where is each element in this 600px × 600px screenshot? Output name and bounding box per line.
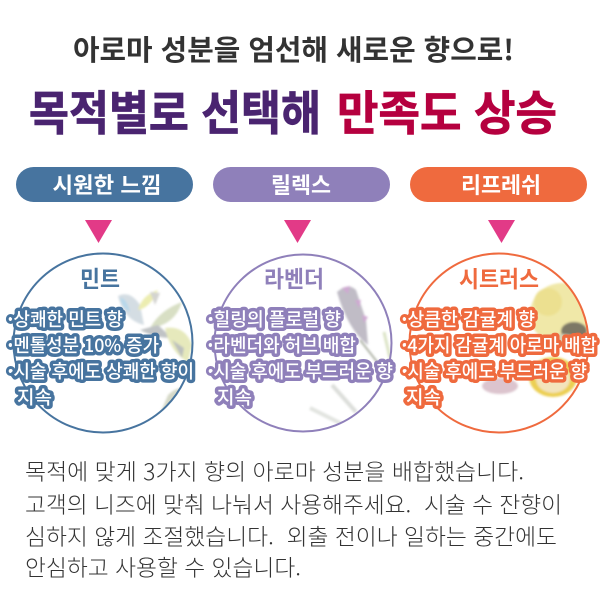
- list: mint: [8, 306, 194, 410]
- pill: refresh: [410, 167, 587, 202]
- heading: citrus: 시트러스: [459, 260, 539, 294]
- arrow: mint: [85, 220, 112, 243]
- panel: citrus: [402, 254, 597, 432]
- pill: refresh: 리프레쉬: [461, 168, 541, 200]
- main title: 목적별로 선택해: [29, 75, 321, 144]
- panel: lavender: [208, 254, 393, 432]
- subtitle: 아로마 성분을 엄선해 새로운 향으로!: [73, 28, 514, 69]
- pill: cool feeling: [16, 167, 193, 202]
- arrow: citrus: [488, 220, 515, 243]
- description text: 심하지 않게 조절했습니다. 외출 전이나 일하는 중간에도: [25, 520, 557, 552]
- list: lavender: ·라벤더와 허브 배합: [208, 332, 356, 358]
- list: mint: ·멘톨성분 10% 증가: [8, 332, 159, 358]
- list: citrus: ·4가지 감귤계 아로마 배합: [402, 332, 597, 358]
- list: citrus: 지속: [406, 384, 441, 410]
- main title: 만족도 상승: [337, 75, 557, 144]
- list: citrus: [402, 306, 597, 410]
- citrus illustration: [482, 283, 594, 397]
- description text: [25, 455, 562, 583]
- description text: 목적에 맞게 3가지 향의 아로마 성분을 배합했습니다.: [25, 455, 524, 487]
- description text: 고객의 니즈에 맞춰 나눠서 사용해주세요. 시술 수 잔향이: [25, 488, 562, 520]
- lavender illustration: [310, 286, 390, 424]
- list: mint: 지속: [17, 384, 52, 410]
- list: lavender: 지속: [217, 384, 252, 410]
- list: lavender: [208, 306, 393, 410]
- list: lavender: ·시술 후에도 부드러운 향: [208, 358, 393, 384]
- list: citrus: ·상큼한 감귤계 향: [402, 306, 535, 332]
- list: citrus: ·시술 후에도 부드러운 향: [402, 358, 587, 384]
- list: lavender: ·힐링의 플로럴 향: [208, 306, 341, 332]
- heading: lavender: 라벤더: [264, 260, 324, 294]
- pill: relax: [213, 167, 390, 202]
- pill: relax: 릴렉스: [271, 168, 331, 200]
- mint leaves illustration: [118, 290, 192, 414]
- list: mint: ·상쾌한 민트 향: [8, 306, 123, 332]
- heading: mint: 민트: [80, 260, 120, 294]
- main title: [29, 75, 557, 144]
- panel: mint: [8, 254, 194, 432]
- description text: 안심하고 사용할 수 있습니다.: [25, 551, 301, 583]
- pill: cool feeling: 시원한 느낌: [52, 168, 162, 200]
- arrow: lavender: [284, 220, 311, 243]
- list: mint: ·시술 후에도 상쾌한 향이: [8, 358, 194, 384]
